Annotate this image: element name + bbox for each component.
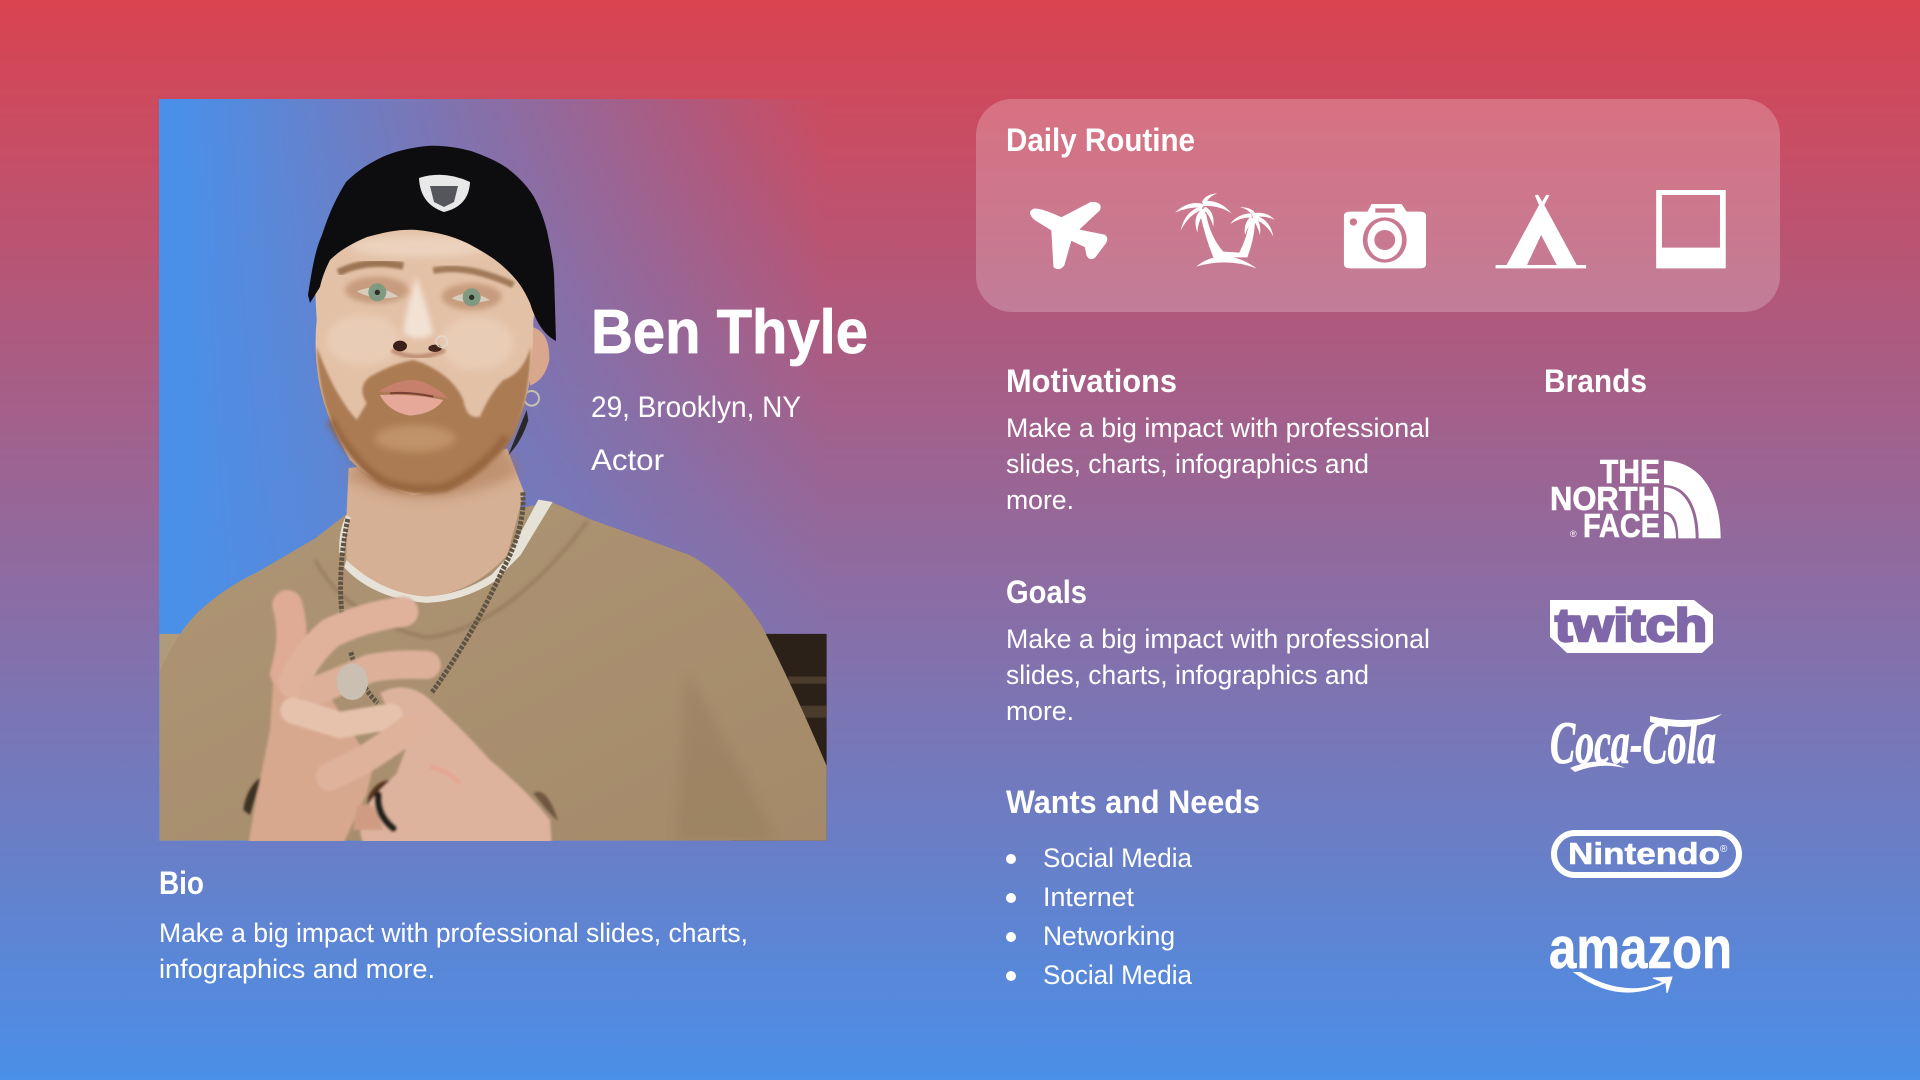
heading: goals: Goals xyxy=(1006,574,1087,610)
text: bio body: infographics and more. xyxy=(159,954,435,984)
text: goals body: more. xyxy=(1006,696,1074,726)
heading: motivations: Motivations xyxy=(1006,363,1177,399)
logo: The North Face: NORTH xyxy=(1550,480,1660,517)
panel background xyxy=(976,99,1780,312)
photo gradient backdrop xyxy=(159,99,827,841)
text: age and location: 29, Brooklyn, NY xyxy=(591,391,801,424)
text: motivations body xyxy=(1006,413,1430,515)
heading: brands: Brands xyxy=(1544,363,1647,399)
logo: Coca-Cola: Coca-Cola xyxy=(1550,710,1716,776)
section: brands xyxy=(1544,363,1739,993)
section: goals xyxy=(1006,574,1430,726)
text: motivations body: more. xyxy=(1006,485,1074,515)
text: goals body: slides, charts, infographics and xyxy=(1006,660,1369,690)
bullet list xyxy=(1006,843,1193,990)
heading: daily routine: Daily Routine xyxy=(1006,122,1195,158)
face xyxy=(315,220,540,495)
text: occupation: Actor xyxy=(591,444,664,477)
icons row xyxy=(1031,190,1726,268)
bullet list: Social Media xyxy=(1043,843,1193,873)
text: goals body: Make a big impact with professional xyxy=(1006,624,1430,654)
section: wants and needs xyxy=(1006,784,1260,990)
logo: Twitch: twitch xyxy=(1555,599,1707,651)
logo: Nintendo: ® xyxy=(1720,844,1728,855)
icon: camera xyxy=(1344,204,1426,268)
logo: Amazon: amazon xyxy=(1549,916,1732,981)
text: bio body: Make a big impact with professional slides, charts, xyxy=(159,918,748,948)
heading: bio: Bio xyxy=(159,865,204,901)
icon: instant photo frame xyxy=(1656,190,1726,268)
panel: daily routine xyxy=(976,99,1780,312)
logo: The North Face: THE xyxy=(1600,453,1660,490)
logo: The North Face xyxy=(1550,453,1721,544)
heading: name: Ben Thyle xyxy=(591,298,868,367)
text: motivations body: slides, charts, infographics and xyxy=(1006,449,1369,479)
icon: airplane xyxy=(1031,203,1106,268)
logo: The North Face: FACE xyxy=(1583,507,1660,544)
heading: wants and needs: Wants and Needs xyxy=(1006,784,1260,820)
logo: The North Face: ® xyxy=(1570,529,1577,539)
icon: palm trees xyxy=(1175,193,1275,268)
logo: Coca-Cola xyxy=(1550,710,1722,776)
ear and earring xyxy=(315,220,549,495)
panel: profile photo xyxy=(159,99,827,843)
text: goals body xyxy=(1006,624,1430,726)
bullet list: Networking xyxy=(1043,921,1175,951)
text: motivations body: Make a big impact with professional xyxy=(1006,413,1430,443)
text: bio body xyxy=(159,918,748,984)
hands xyxy=(243,605,558,843)
icon: tent xyxy=(1496,195,1586,268)
section: motivations xyxy=(1006,363,1430,515)
bullet list: Social Media xyxy=(1043,960,1193,990)
logo: Nintendo xyxy=(1554,833,1739,875)
bullet list: Internet xyxy=(1043,882,1134,912)
hat xyxy=(308,146,556,341)
photo: portrait of Ben Thyle xyxy=(159,146,827,843)
logo: Nintendo: Nintendo xyxy=(1568,836,1720,871)
